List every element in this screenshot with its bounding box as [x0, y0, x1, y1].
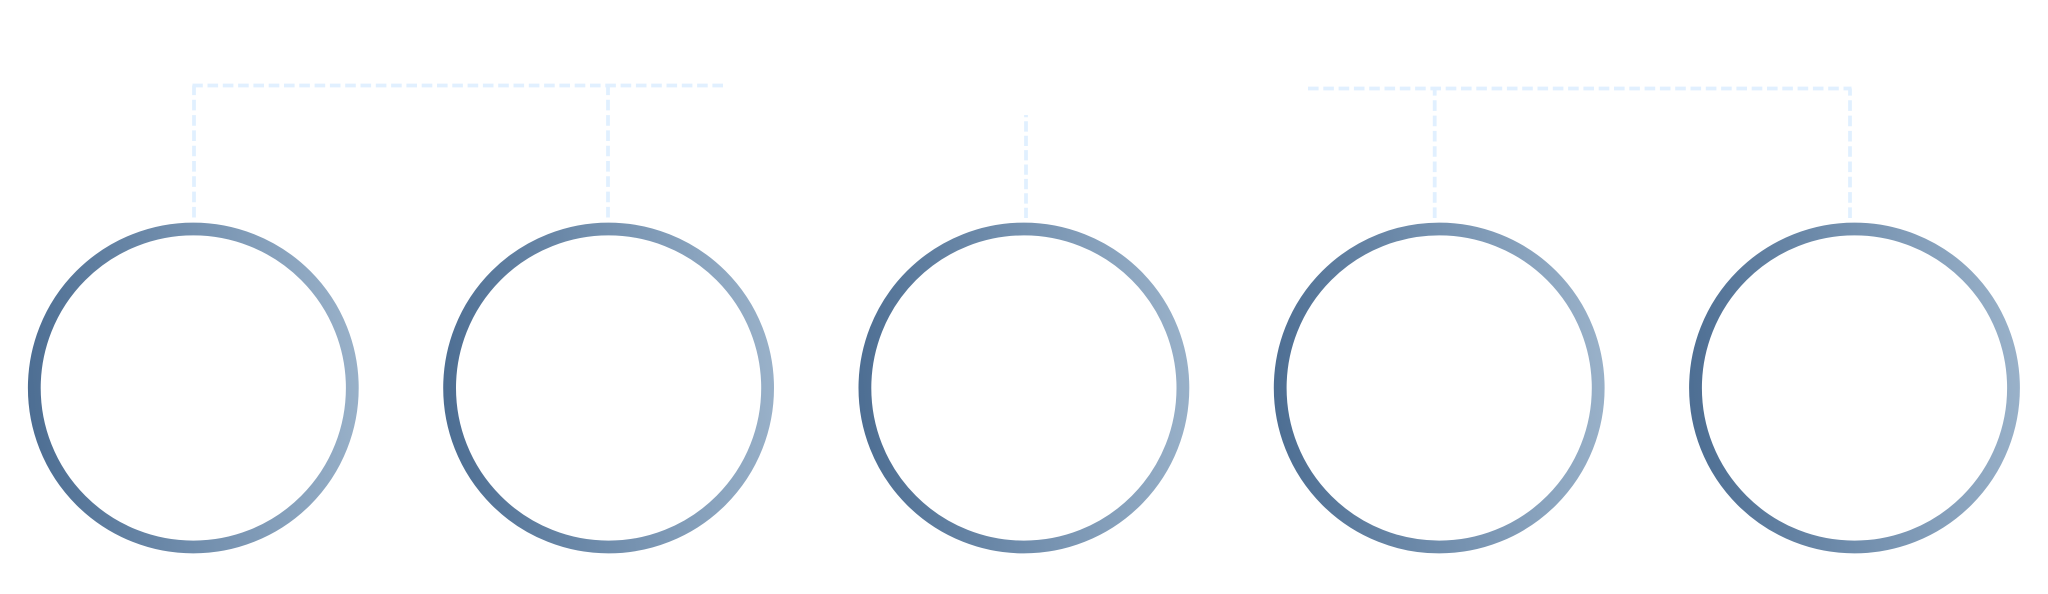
circle 2 [450, 229, 768, 547]
circle 1 [34, 229, 352, 547]
circle 4 [1280, 229, 1598, 547]
connector: right bracket [1308, 88, 1852, 218]
connector: center line [1024, 115, 1028, 218]
circle 5 [1696, 229, 2014, 547]
circle 3 [865, 229, 1183, 547]
connector: left bracket [192, 86, 723, 218]
